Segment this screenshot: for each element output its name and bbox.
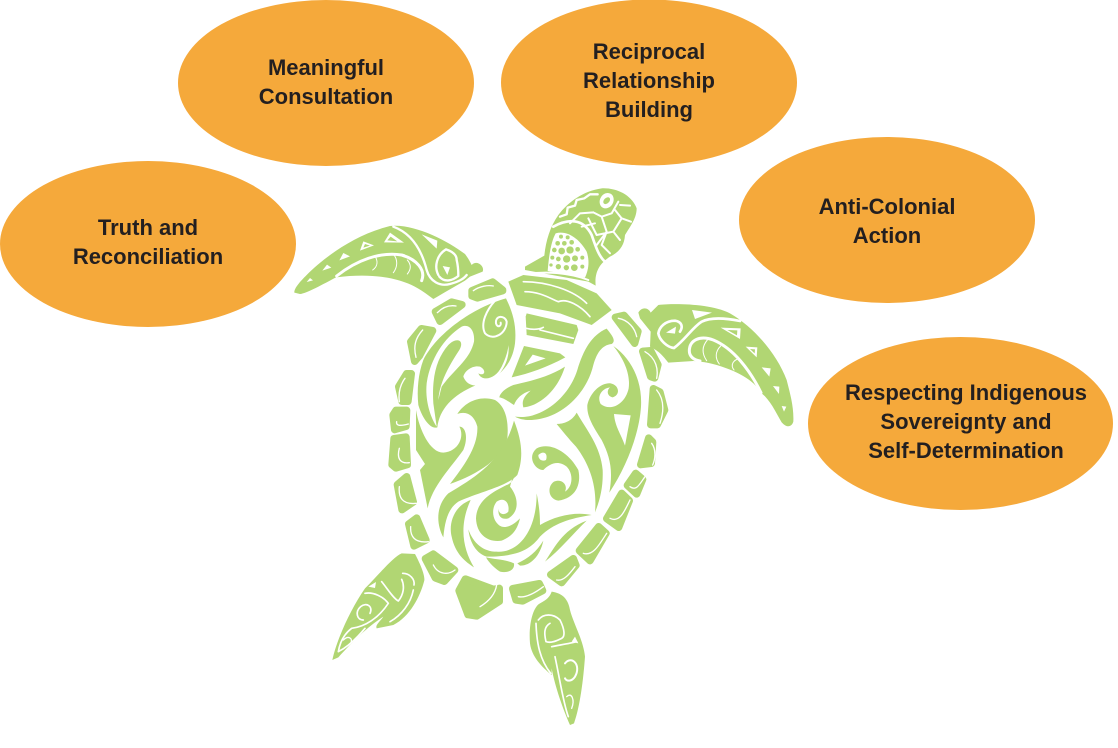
callout: Reciprocal Relationship Building: Reciprocal (593, 39, 705, 64)
triangular section (512, 346, 565, 377)
long lower blade (438, 421, 521, 537)
central S blade (450, 398, 508, 484)
callout: Respecting Indigenous Sovereignty and Self-Determination: Self-Determination (868, 438, 1064, 463)
callout: Anti-Colonial Action: Anti-Colonial (819, 194, 955, 219)
neck plate (508, 275, 612, 325)
callout: Anti-Colonial Action: Action (853, 223, 921, 248)
upper-left shell section (418, 298, 515, 428)
callout: Reciprocal Relationship Building (501, 0, 797, 166)
callout: Truth and Reconciliation: Reconciliation (73, 244, 223, 269)
callout: Meaningful Consultation: Meaningful (268, 55, 384, 80)
neck and head (525, 188, 637, 286)
callout: Meaningful Consultation (178, 0, 474, 166)
callout: Respecting Indigenous Sovereignty and Self-Determination: Respecting Indigenous (845, 380, 1087, 405)
carapace and marginal scutes (392, 275, 665, 616)
central arrow blade (499, 367, 565, 407)
right shell section (587, 346, 641, 493)
callout: Truth and Reconciliation (0, 161, 296, 327)
left lower section (416, 410, 466, 508)
callout: Anti-Colonial Action (739, 137, 1035, 303)
long right blade (515, 329, 614, 420)
left front flipper (294, 226, 483, 299)
lower right blades (557, 413, 603, 512)
callout: Respecting Indigenous Sovereignty and Self-Determination: Sovereignty and (880, 409, 1052, 434)
callout: Respecting Indigenous Sovereignty and Self-Determination (808, 337, 1113, 510)
callout: Truth and Reconciliation: Truth and (98, 215, 198, 240)
lower spiral section (476, 465, 520, 541)
right front flipper (638, 304, 793, 426)
marginal scutes (392, 282, 665, 616)
callout: Reciprocal Relationship Building: Relationship (583, 68, 715, 93)
icon: sea turtle (294, 188, 793, 725)
callout: Reciprocal Relationship Building: Building (605, 97, 693, 122)
leaf section (451, 500, 474, 567)
rear flippers (332, 553, 585, 725)
callout: Meaningful Consultation: Consultation (259, 84, 393, 109)
bottom sweep (468, 493, 592, 557)
